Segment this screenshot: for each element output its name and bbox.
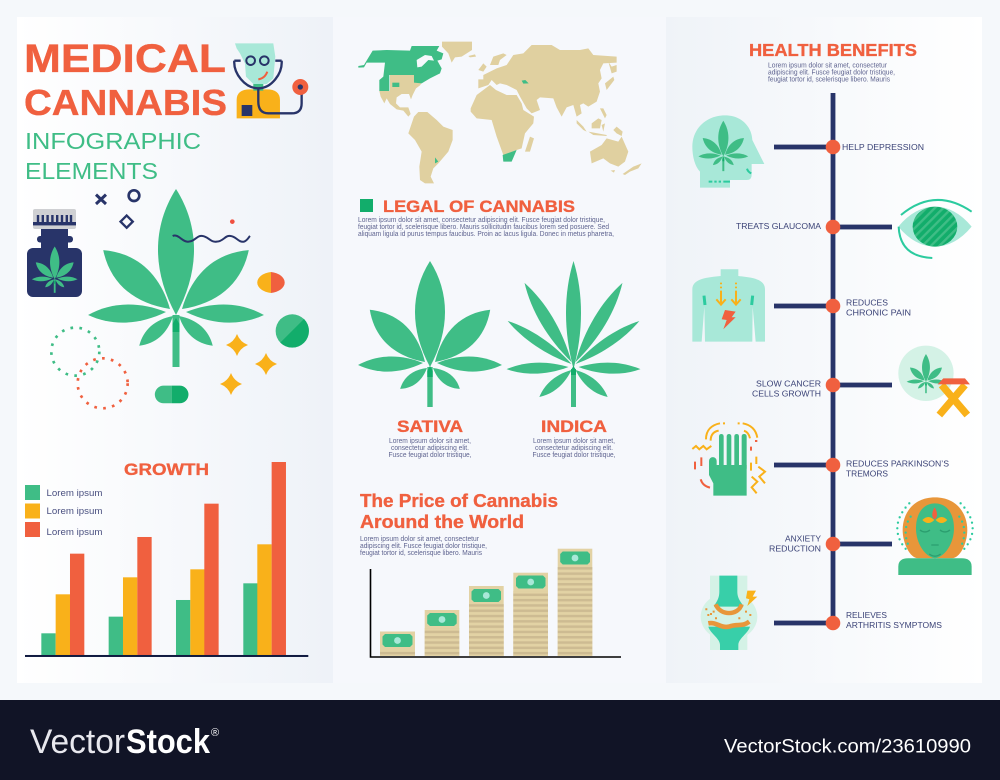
legend: Lorem ipsum [46,527,103,538]
text block: health benefits [768,62,895,84]
icon: head with leaf [692,115,764,188]
icon: trembling hand [692,423,765,496]
text block: health benefits: Lorem ipsum dolor sit amet, consectetur [768,62,888,70]
leaf: indica [505,261,642,407]
leaf: sativa [358,261,502,407]
label: reduces chronic pain: REDUCES [846,298,888,308]
labels: sativa: Fusce feugiat dolor tristique, [388,452,472,459]
text block: legal: feugiat tortor id, scelerisque libero. Mauris sollicitudin faucibus lorem sed posuere. Sed [358,224,609,231]
heading: price of cannabis: The Price of Cannabis [360,491,558,511]
text block: health benefits: feugiat tortor id, scelerisque libero. Mauris [768,76,891,84]
icon: sparkles [220,334,277,395]
stack 2 [425,610,459,656]
label: slow cancer cells growth: CELLS GROWTH [752,388,821,398]
icon: eye [898,200,972,258]
icon: round pill [276,314,309,348]
main cannabis leaf [88,189,264,367]
label: relieves arthritis symptoms: RELIEVES [846,610,887,620]
icon: meditating person [897,497,973,575]
heading: price of cannabis [360,491,558,532]
logo: VectorStock: Vector [30,723,125,761]
icon: arthritic joint [701,576,757,650]
label: treats glaucoma: TREATS GLAUCOMA [736,221,821,231]
label: relieves arthritis symptoms: ARTHRITIS SYMPTOMS [846,620,942,630]
footer bar [0,700,1000,780]
bar chart: growth [25,462,308,657]
icon: red dot [230,219,235,224]
logo: VectorStock [30,723,219,761]
heading: health benefits: HEALTH BENEFITS [749,40,917,60]
text block: price: adipiscing elit. Fusce feugiat dolor tristique, [360,543,487,550]
label: reduces parkinson's tremors: REDUCES PARKINSON’S [846,458,949,468]
heading: legal of cannabis: LEGAL OF CANNABIS [383,197,575,216]
label: anxiety reduction: REDUCTION [769,544,821,554]
stack 1 [380,632,415,656]
labels: indica: consectetur adipiscing elit. [535,445,613,452]
stack 4 [513,573,548,656]
text block: price: Lorem ipsum dolor sit amet, consectetur [360,536,480,543]
icon: chest with pain [692,269,765,342]
labels: indica: Lorem ipsum dolor sit amet, [533,438,615,445]
labels: indica [532,417,616,459]
title: MEDICAL [24,37,226,81]
icon: oval pill [257,272,285,293]
icon: cancer leaf and ribbon [898,346,970,415]
labels: indica: Fusce feugiat dolor tristique, [532,452,616,459]
logo: VectorStock: ® [211,727,219,739]
chart: money stacks [370,549,621,657]
icon: capsule [155,386,188,403]
icon: ring [129,190,139,201]
timeline [774,93,892,630]
label: relieves arthritis symptoms [846,610,942,630]
heading: growth: GROWTH [124,460,209,479]
labels: indica: INDICA [541,417,607,436]
title: INFOGRAPHIC [25,128,201,154]
text block: legal: aliquam ligula id purus tempus faucibus. Proin ac lacus ligula. Donec in metus pharetra, [358,231,614,238]
title: CANNABIS [24,82,227,123]
label: anxiety reduction: ANXIETY [785,534,821,544]
label: slow cancer cells growth: SLOW CANCER [756,378,821,388]
legend [25,485,103,538]
icon: diamond [121,216,133,228]
stack 3 [469,586,504,656]
axes [370,569,621,657]
icon: medicine bottle [27,209,82,297]
title [24,37,227,184]
label: slow cancer cells growth [752,378,821,398]
legend: Lorem ipsum [46,506,103,517]
icon: cross [96,195,106,204]
label: anxiety reduction [769,534,821,554]
label: reduces chronic pain [846,298,911,318]
decorative shapes and pills [51,190,309,408]
text block: legal: Lorem ipsum dolor sit amet, consectetur adipiscing elit. Fusce feugiat dolor tristique, [358,217,605,224]
labels: sativa: SATIVA [397,417,463,436]
logo: VectorStock: Stock [126,723,210,761]
heading: price of cannabis: Around the World [360,512,524,532]
stack 5 [558,549,592,656]
text block: price [360,536,487,557]
labels: sativa: consectetur adipiscing elit. [391,445,469,452]
text block: price: feugiat tortor id, scelerisque libero. Mauris [360,550,483,557]
label: reduces chronic pain: CHRONIC PAIN [846,308,911,318]
legend: Lorem ipsum [46,488,103,499]
text block: legal [358,217,614,238]
label: reduces parkinson's tremors [846,458,949,478]
icon: dotted green circle [51,328,99,376]
image id: VectorStock.com/23610990 [724,736,971,758]
labels: sativa [388,417,472,459]
labels: sativa: Lorem ipsum dolor sit amet, [389,438,471,445]
title: ELEMENTS [25,158,158,184]
text block: health benefits: adipiscing elit. Fusce feugiat dolor tristique, [768,70,895,76]
label: help depression: HELP DEPRESSION [842,142,924,152]
icon: wave [173,235,250,242]
world map [358,42,642,183]
label: reduces parkinson's tremors: TREMORS [846,468,888,478]
icon: dotted red circle [78,358,128,408]
icon: doctor with stethoscope [234,43,308,118]
